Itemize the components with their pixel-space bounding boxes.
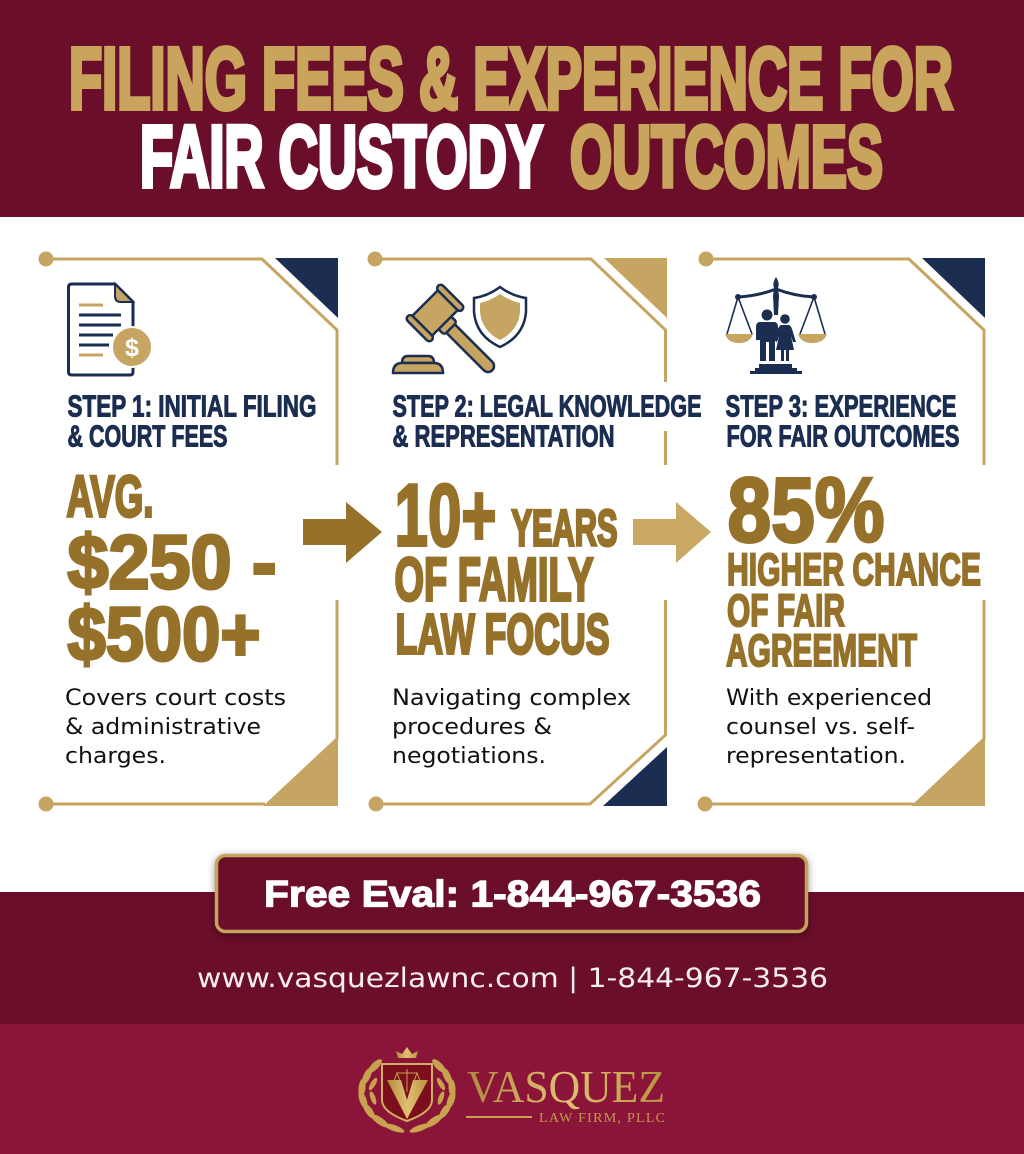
step 3 heading (726, 390, 960, 454)
step 1 figure: AVG. (66, 464, 154, 530)
step 2 description: Navigating complex (392, 686, 631, 711)
card 3 frame (698, 252, 985, 812)
step 1 heading (68, 390, 316, 454)
step 3 figure: OF FAIR (727, 585, 845, 636)
logo wordmark: VASQUEZ (467, 1062, 665, 1112)
step 3 figure (726, 460, 981, 676)
call to action button: Free Eval: 1-844-967-3536 (264, 874, 761, 914)
step 2 figure: 10+ (394, 466, 496, 564)
panel: step 3 (698, 252, 985, 812)
icon: document with dollar coin (68, 284, 152, 375)
arrow: step 1 to step 2 (303, 502, 382, 563)
step 3 description (726, 686, 932, 769)
card 1 frame (38, 252, 338, 812)
step 1 description: charges. (65, 744, 166, 769)
step 2 description (392, 686, 631, 769)
panel: step 1 (38, 252, 338, 812)
step 1 description: Covers court costs (65, 686, 286, 711)
step 3 description: counsel vs. self- (726, 715, 915, 740)
icon: document with dollar coin: $ (125, 334, 139, 362)
step 3 description: With experienced (726, 686, 932, 711)
logo emblem (357, 1047, 457, 1135)
step 2 description: negotiations. (392, 744, 546, 769)
logo band (0, 1024, 1024, 1154)
logo: Vasquez Law Firm (357, 1047, 665, 1135)
header band with title: FAIR CUSTODY (140, 108, 543, 206)
step 2 heading (392, 390, 702, 454)
call to action button (216, 856, 806, 932)
contact band (0, 892, 1024, 1024)
logo wordmark: LAW FIRM, PLLC (539, 1111, 665, 1126)
step 1 figure: $250 - (68, 520, 276, 606)
step 1 description: & administrative (65, 715, 261, 740)
panel: step 2 (368, 252, 702, 812)
step 1 description (65, 686, 286, 769)
icon: scales of justice with family (725, 277, 827, 374)
step 2 figure: OF FAMILY (394, 546, 594, 614)
step 2 figure: LAW FOCUS (396, 602, 610, 666)
arrow: step 2 to step 3 (633, 502, 711, 563)
step 2 description: procedures & (392, 715, 552, 740)
step 3 figure: 85% (728, 460, 884, 562)
step 3 figure: AGREEMENT (726, 625, 917, 676)
card 2 frame (368, 252, 667, 812)
step 1 figure (66, 464, 276, 678)
website and phone line: www.vasquezlawnc.com | 1-844-967-3536 (197, 963, 828, 994)
step 3 description: representation. (726, 744, 906, 769)
icon: gavel and shield (393, 283, 526, 388)
header band with title (0, 0, 1024, 217)
step 2 heading: STEP 2: LEGAL KNOWLEDGE (392, 390, 702, 424)
step 1 figure: $500+ (68, 592, 260, 678)
step 1 heading: & COURT FEES (68, 420, 228, 454)
step 2 figure (394, 466, 618, 666)
step 2 figure: YEARS (512, 500, 618, 556)
step 2 heading: & REPRESENTATION (392, 420, 614, 454)
step 1 heading: STEP 1: INITIAL FILING (68, 390, 316, 424)
